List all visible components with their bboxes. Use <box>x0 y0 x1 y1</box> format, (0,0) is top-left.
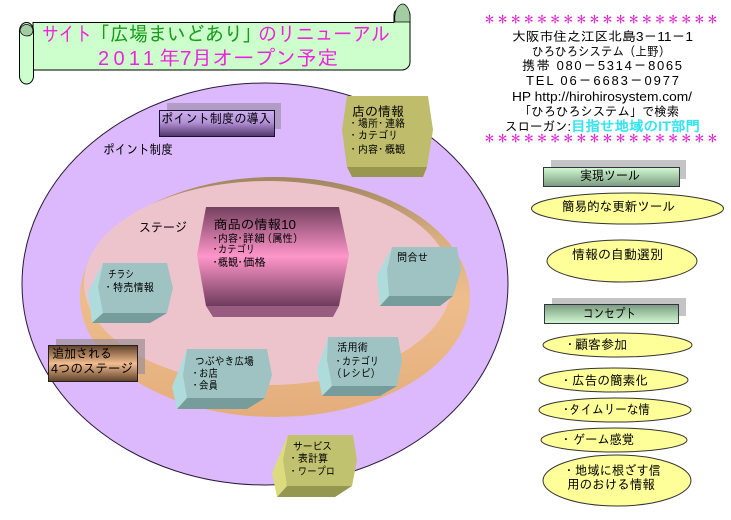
ellipse: timely information: ・ <box>560 402 572 417</box>
box: tsubuyaki square: 会員 <box>199 380 218 392</box>
box: product information: ・ <box>210 233 220 245</box>
box: shop information: 内容 <box>358 144 378 156</box>
outer ellipse: point system <box>22 83 508 485</box>
box: inquiries <box>377 247 461 306</box>
point system intro box: ポイント制度の導入 <box>161 111 271 126</box>
box: tsubuyaki square: お店 <box>199 368 218 380</box>
box: services: ・ <box>288 466 298 478</box>
box: services: ・ <box>288 453 298 465</box>
box: flyers <box>88 263 173 323</box>
heading: concept: コンセプト <box>583 306 636 321</box>
box: usage tips: 活用術 <box>337 341 368 354</box>
box: usage tips: ・ <box>332 356 344 368</box>
ellipse: locally rooted reliable information: ・ <box>562 463 576 478</box>
box: shop information: カテゴリ <box>358 129 398 142</box>
box: flyers: 特売情報 <box>113 282 154 294</box>
contact information: 大阪市住之江区北島3－11－1 <box>512 29 693 44</box>
box: shop information <box>342 96 433 177</box>
box: shop information: ・ <box>375 118 386 130</box>
box: product information <box>197 207 349 317</box>
box: product information: ・ <box>234 257 246 269</box>
title banner <box>20 4 410 84</box>
box: tsubuyaki square: つぶやき広場 <box>195 355 254 368</box>
ellipse: customer participation: ・ <box>564 337 576 352</box>
heading: concept <box>544 298 686 324</box>
ellipse: timely information: タイムリーな情 <box>569 402 650 417</box>
ellipse: locally rooted reliable information: 用のおける情報 <box>567 477 655 492</box>
box: product information: ・ <box>234 233 246 245</box>
box: four added stages: 追加される <box>52 346 112 361</box>
box: product information: 商品の情報10 <box>214 217 296 232</box>
box: shop information: 連絡 <box>385 118 405 130</box>
title banner: 「 <box>90 24 110 46</box>
ellipse: simpler advertising: 広告の簡素化 <box>572 373 648 388</box>
ellipse: simpler advertising: ・ <box>560 373 572 388</box>
title banner: 広場まいどあり <box>110 24 243 46</box>
title banner: 」 <box>242 24 262 46</box>
ellipse: game feel: ゲーム感覚 <box>573 432 634 447</box>
box: product information: ・ <box>210 257 220 269</box>
box: product information: カテゴリ <box>218 243 255 256</box>
box: product information: ・ <box>210 244 220 256</box>
ellipse: customer participation <box>543 333 692 357</box>
box: flyers: チラシ <box>108 269 134 281</box>
contact information: ＊＊＊＊＊＊＊＊＊＊＊＊＊＊＊＊＊＊ <box>483 12 719 27</box>
box: four added stages <box>48 339 145 382</box>
title banner: のリニューアル <box>258 24 390 46</box>
title banner: サイト <box>42 24 92 46</box>
ellipse: simple update tool <box>532 193 724 224</box>
ellipse: simple update tool: 簡易的な更新ツール <box>562 199 675 214</box>
box: tsubuyaki square <box>172 349 272 409</box>
point system intro box <box>160 103 281 136</box>
box: four added stages: 4つのステージ <box>51 361 133 376</box>
heading: tools <box>544 160 686 186</box>
box: shop information: 概観 <box>385 143 405 156</box>
box: usage tips <box>317 337 402 396</box>
heading: tools: 実現ツール <box>580 168 640 183</box>
box: product information: 概観 <box>218 256 238 269</box>
box: usage tips: （レシピ） <box>332 368 380 380</box>
ellipse: automatic information selection: 情報の自動選別 <box>572 247 663 262</box>
label: stage: ステージ <box>139 220 187 235</box>
box: product information: 内容 <box>218 233 238 245</box>
box: shop information: ・ <box>348 130 358 142</box>
box: product information: 詳細 <box>243 232 265 245</box>
label: point system: ポイント制度 <box>103 142 173 157</box>
stage ellipse: additional stages <box>80 177 470 417</box>
box: services: ワープロ <box>298 465 335 478</box>
contact information: HP http://hirohirosystem.com/ <box>512 89 692 104</box>
box: shop information: ・ <box>348 118 358 130</box>
contact information: スローガン: <box>505 119 571 134</box>
stage ellipse: inner <box>84 181 452 385</box>
contact information: 「ひろひろシステム」で検索 <box>519 104 679 119</box>
box: shop information: 店の情報 <box>352 104 404 119</box>
box: tsubuyaki square: ・ <box>190 368 200 380</box>
contact information: TEL 06－6683－0977 <box>526 73 679 88</box>
box: tsubuyaki square: ・ <box>190 380 200 392</box>
ellipse: simpler advertising <box>539 368 688 392</box>
ellipse: locally rooted reliable information <box>543 455 691 506</box>
contact information <box>483 12 719 146</box>
box: services <box>272 435 357 497</box>
box: services: サービス <box>293 441 332 453</box>
title banner: 年7月オープン予定 <box>159 47 338 70</box>
ellipse: game feel <box>541 428 687 452</box>
box: shop information: ・ <box>375 144 386 156</box>
ellipse: automatic information selection <box>547 240 697 282</box>
box: services: 表計算 <box>298 453 328 465</box>
box: flyers: ・ <box>102 282 114 294</box>
box: inquiries: 問合せ <box>397 252 428 264</box>
title banner: 2011 <box>98 48 154 70</box>
ellipse: game feel: ・ <box>560 432 572 447</box>
box: shop information: ・ <box>348 144 358 156</box>
contact information: 携帯 080－5314－8065 <box>522 58 682 73</box>
ellipse: customer participation: 顧客参加 <box>575 337 627 352</box>
box: product information: （属性） <box>262 233 303 245</box>
box: product information: 価格 <box>243 257 266 269</box>
contact information: 目指せ地域のIT部門 <box>571 118 700 134</box>
contact information: ＊＊＊＊＊＊＊＊＊＊＊＊＊＊＊＊＊＊ <box>483 131 719 146</box>
ellipse: timely information <box>539 398 691 422</box>
contact information: ひろひろシステム（上野） <box>532 44 670 59</box>
box: shop information: 場所 <box>358 117 378 130</box>
box: usage tips: カテゴリ <box>342 355 379 368</box>
ellipse: locally rooted reliable information: 地域に根ざす信 <box>575 463 661 478</box>
